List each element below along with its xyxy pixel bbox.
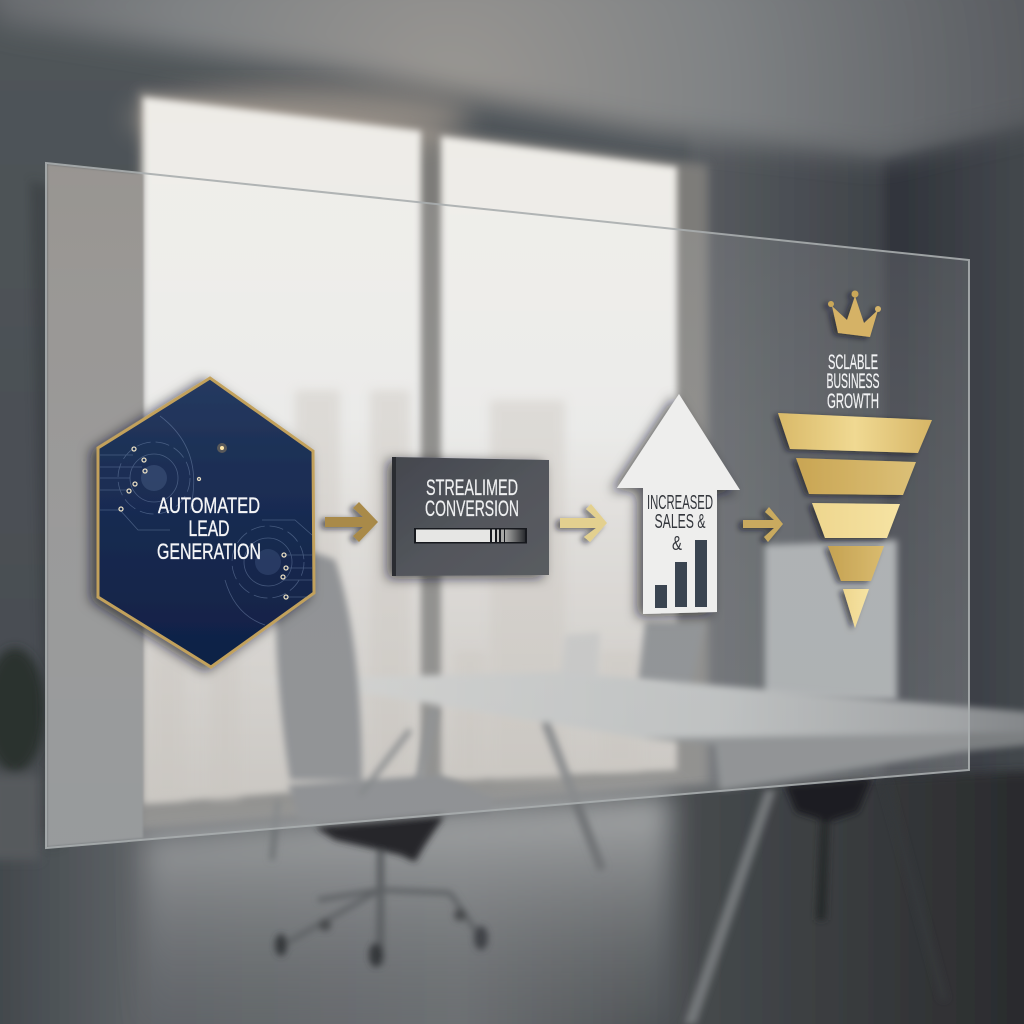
wall: centre right — [690, 130, 890, 810]
step 3: up arrow sales — [617, 394, 740, 614]
office chair — [272, 551, 492, 967]
wall: right — [885, 118, 1024, 800]
floor — [0, 770, 1024, 1024]
warm glow — [130, 88, 470, 148]
arrow 1 — [325, 502, 378, 542]
step 1: hexagon lead generation — [98, 378, 314, 667]
arrow 2 — [560, 504, 607, 542]
icon: crown — [828, 290, 881, 337]
conversion plate — [393, 457, 549, 576]
hexagon label: LEAD — [188, 516, 230, 541]
bar chart — [655, 540, 707, 608]
floor window reflection — [144, 795, 672, 1024]
glass panel shadow — [30, 180, 62, 848]
sales label — [647, 492, 713, 555]
step 4: scalable growth: BUSINESS — [826, 370, 880, 393]
hexagon label: AUTOMATED — [158, 493, 260, 518]
sales label: SALES & — [654, 511, 706, 533]
growth label: SCLABLE — [828, 351, 878, 374]
sales label: & — [672, 533, 682, 555]
circuit nodes — [119, 447, 288, 599]
funnel — [778, 413, 932, 628]
blurred skyline — [150, 390, 640, 800]
desk — [250, 672, 1024, 1024]
progress bar — [414, 528, 527, 544]
panel strip left of window — [47, 164, 143, 847]
conversion label: STREALIMED — [426, 475, 518, 500]
sales label: INCREASED — [647, 492, 713, 514]
conversion label — [425, 475, 519, 521]
window frame — [138, 90, 708, 832]
monitors — [560, 540, 897, 700]
growth label: GROWTH — [827, 390, 879, 413]
glowing dot — [217, 443, 227, 453]
ceiling — [0, 0, 1024, 157]
conversion label: CONVERSION — [425, 496, 519, 521]
glass panel — [46, 163, 969, 848]
circuit gear art — [100, 416, 312, 625]
window panes — [143, 97, 677, 804]
growth label — [826, 351, 880, 413]
step 2: conversion panel — [392, 457, 549, 576]
hexagon label — [157, 493, 261, 564]
wall: left and centre — [0, 10, 882, 840]
arrow 3 — [743, 507, 783, 542]
plate dark edge — [392, 457, 396, 576]
step 4: scalable growth — [778, 290, 932, 628]
hexagon plate — [98, 378, 314, 667]
plant and pot — [0, 648, 45, 860]
up arrow plate — [617, 394, 740, 614]
hexagon label: GENERATION — [157, 539, 261, 564]
